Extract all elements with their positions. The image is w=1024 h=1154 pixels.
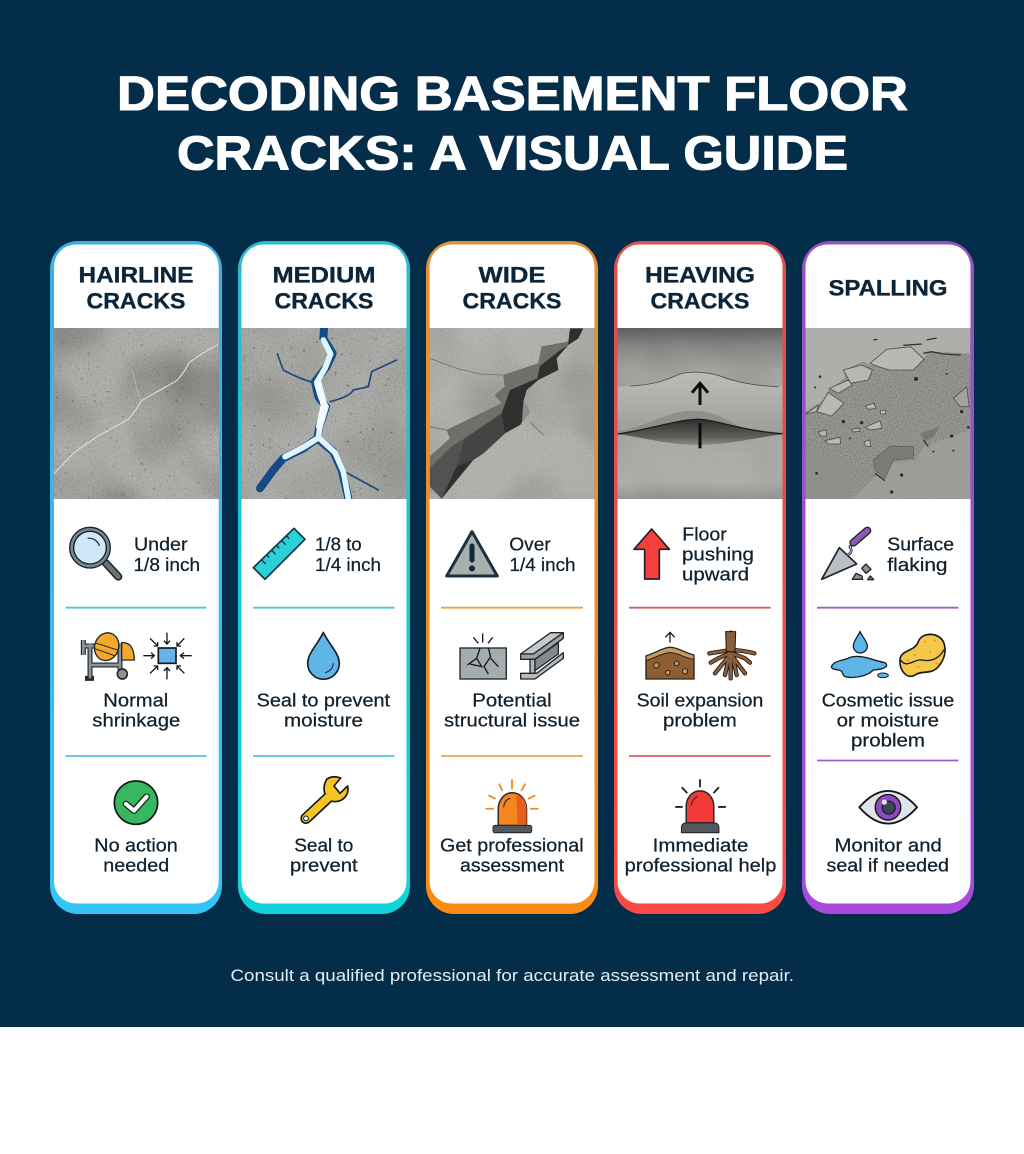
cause text: Cosmetic issue xyxy=(822,691,954,711)
footer note: Consult a qualified professional for accurate assessment and repair. xyxy=(230,966,794,985)
panel: hairline cracks xyxy=(50,241,222,914)
cause text: moisture xyxy=(284,711,363,731)
size text: 1/8 to xyxy=(315,534,362,554)
panel: heaving cracks xyxy=(614,241,786,914)
size text xyxy=(134,534,200,575)
icon: puddle and sponge xyxy=(831,632,945,678)
title: CRACKS: A VISUAL GUIDE xyxy=(177,128,848,180)
size text xyxy=(682,524,754,584)
action text xyxy=(625,836,776,876)
size text: 1/4 inch xyxy=(510,555,576,575)
icon: magnifying glass xyxy=(72,529,118,577)
heading xyxy=(78,262,194,314)
size text: upward xyxy=(682,564,749,584)
action text: prevent xyxy=(290,856,358,876)
heading xyxy=(462,262,562,314)
cause text: Soil expansion xyxy=(637,691,763,711)
size text: flaking xyxy=(887,555,948,575)
size text xyxy=(887,534,954,575)
cause text: problem xyxy=(663,711,737,731)
cause text: structural issue xyxy=(444,711,580,731)
cause text xyxy=(444,691,580,731)
action text: professional help xyxy=(625,856,776,876)
icon: cracked wall and steel beam xyxy=(460,633,563,679)
icon: eye xyxy=(859,791,917,824)
heading: MEDIUM xyxy=(272,262,376,288)
action text: seal if needed xyxy=(826,856,949,876)
cause text xyxy=(822,691,954,751)
action text: assessment xyxy=(460,856,564,876)
cause text: Potential xyxy=(472,691,552,711)
icon: cement mixer and shrinkage arrows xyxy=(83,630,192,679)
size text xyxy=(509,534,576,575)
photo: spalling surface xyxy=(806,328,970,499)
panel: wide cracks xyxy=(426,241,598,914)
photo: hairline crack xyxy=(54,328,219,499)
size text xyxy=(315,534,381,575)
action text: Get professional xyxy=(440,836,584,856)
size text: Surface xyxy=(887,534,954,554)
title xyxy=(117,68,908,180)
icon: red alarm xyxy=(675,779,726,833)
icon: orange alarm xyxy=(485,779,539,833)
icon: ruler xyxy=(253,528,305,579)
action text xyxy=(290,836,358,876)
heading xyxy=(645,262,755,314)
heading: SPALLING xyxy=(828,276,948,301)
size text: pushing xyxy=(682,544,754,564)
icon: wrench xyxy=(304,777,348,821)
photo: wide crack xyxy=(430,328,594,499)
heading: CRACKS xyxy=(650,288,750,314)
panel: medium cracks xyxy=(238,241,410,914)
action text: Monitor and xyxy=(834,836,942,856)
cause text: or moisture xyxy=(837,711,939,731)
icon: green check xyxy=(114,781,158,824)
cause text: Normal xyxy=(103,691,168,711)
heading xyxy=(272,262,376,314)
icon: soil and roots xyxy=(646,632,754,679)
cause text xyxy=(637,691,763,731)
panel: spalling xyxy=(802,241,974,914)
photo: heaving floor xyxy=(618,328,783,499)
icon: trowel with debris xyxy=(822,531,874,580)
heading: CRACKS xyxy=(86,288,186,314)
icon: red up arrow xyxy=(634,529,669,579)
size text: Under xyxy=(134,534,188,554)
action text xyxy=(94,836,178,876)
photo: medium crack xyxy=(242,328,406,499)
action text xyxy=(440,836,584,876)
heading: CRACKS xyxy=(274,288,374,314)
card frame xyxy=(614,241,786,914)
cause text: shrinkage xyxy=(92,711,180,731)
card frame xyxy=(426,241,598,914)
size text: 1/8 inch xyxy=(134,555,200,575)
icon: water drop xyxy=(308,632,339,679)
card frame xyxy=(802,241,974,914)
action text: No action xyxy=(94,836,178,856)
card frame xyxy=(50,241,222,914)
cause text: problem xyxy=(851,731,925,751)
cause text: Seal to prevent xyxy=(257,691,390,711)
heading: CRACKS xyxy=(462,288,562,314)
icon: warning triangle xyxy=(447,532,497,576)
title: DECODING BASEMENT FLOOR xyxy=(117,68,908,121)
action text xyxy=(826,836,949,876)
heading: HEAVING xyxy=(645,262,755,288)
heading: HAIRLINE xyxy=(78,262,194,288)
action text: Immediate xyxy=(653,836,748,856)
action text: needed xyxy=(103,856,169,876)
cause text xyxy=(257,691,390,731)
size text: Floor xyxy=(682,524,727,544)
size text: 1/4 inch xyxy=(315,555,381,575)
action text: Seal to xyxy=(294,836,353,856)
size text: Over xyxy=(509,534,551,554)
card frame xyxy=(238,241,410,914)
heading: WIDE xyxy=(478,262,546,288)
cause text xyxy=(92,691,180,731)
